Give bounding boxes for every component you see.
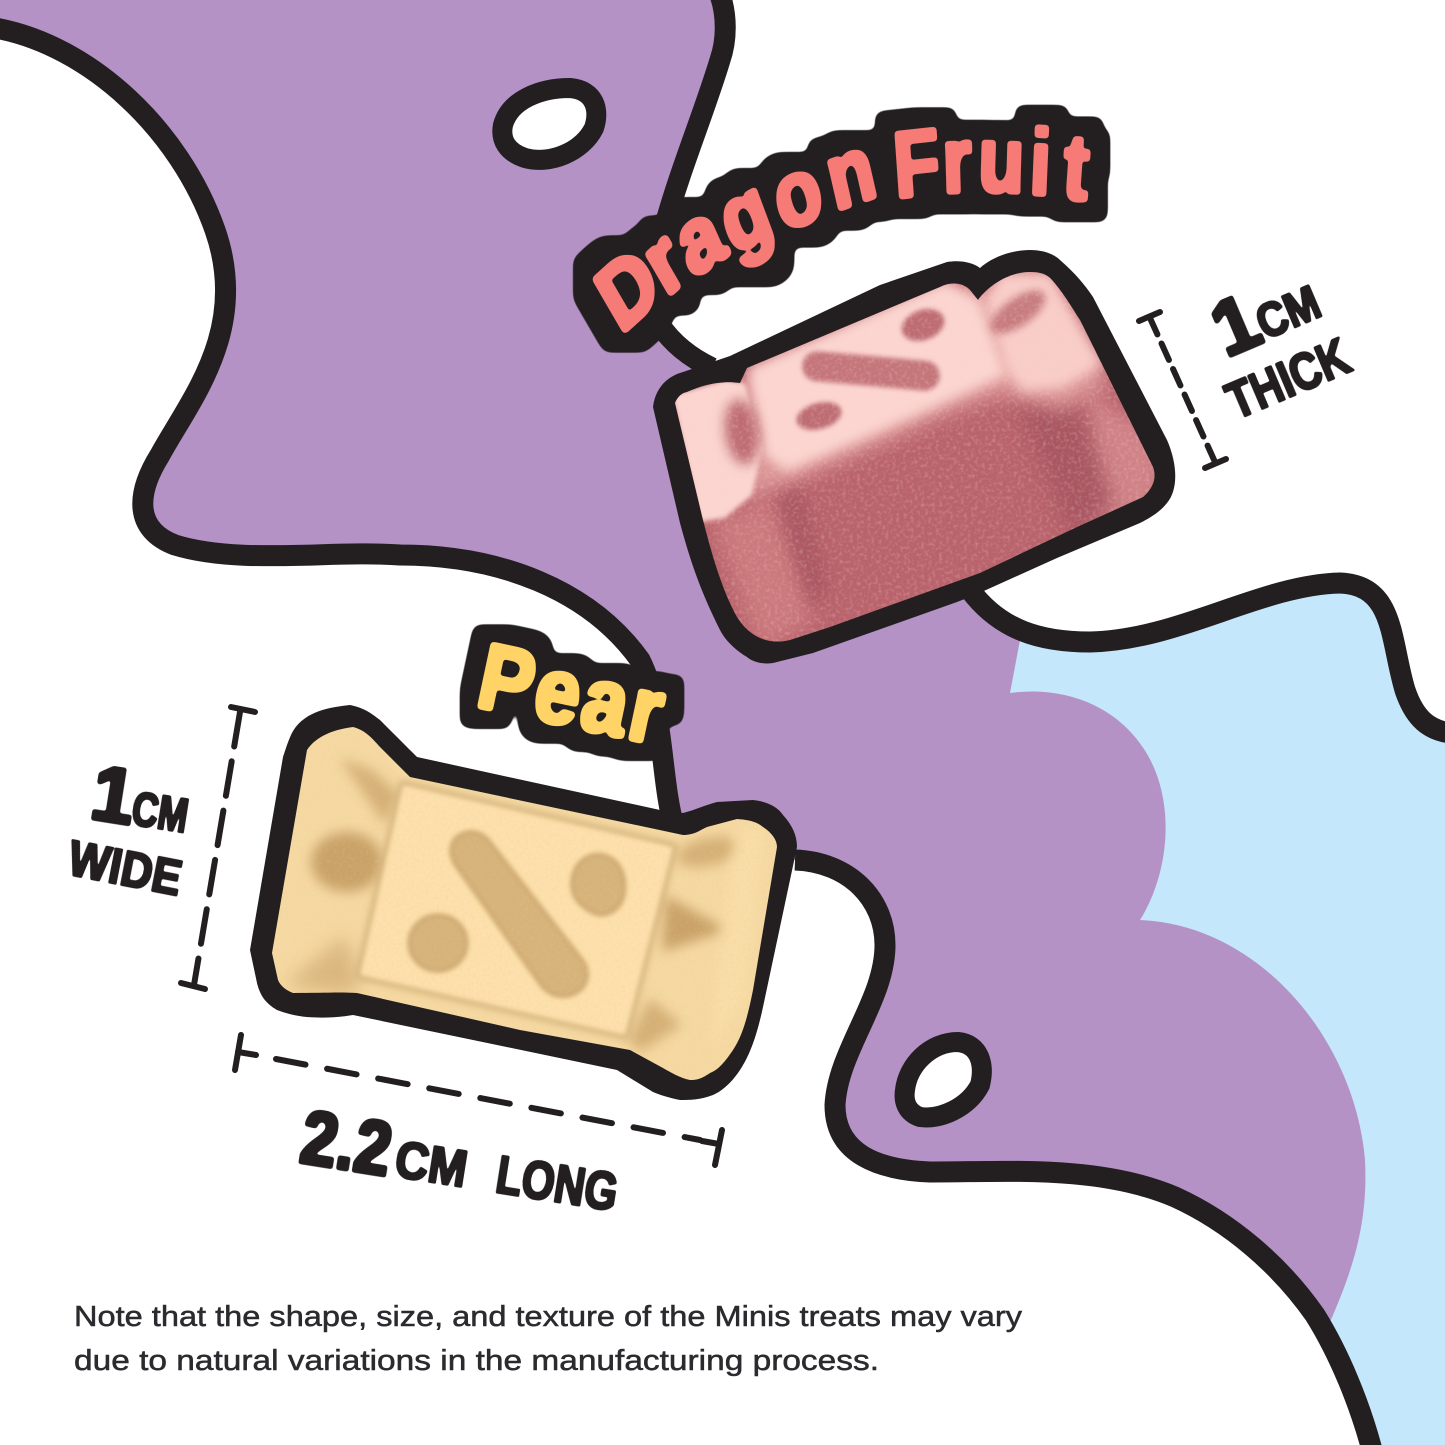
centre panel shadow xyxy=(360,785,673,1035)
wing shading xyxy=(340,758,400,825)
outline: lower curve xyxy=(795,860,1372,1445)
dimension text: 2.2cm long: 2.2 xyxy=(295,1095,398,1193)
left wing dent xyxy=(721,397,763,467)
soft halo under light areas xyxy=(745,280,1110,500)
outline: right wavy curve xyxy=(970,583,1445,733)
treat outline xyxy=(250,705,797,1100)
logo lower dent xyxy=(793,397,845,435)
right wing light edge xyxy=(720,838,748,935)
dimension text: 2.2cm long xyxy=(295,1095,622,1223)
light right wing xyxy=(985,272,1103,392)
centre panel xyxy=(360,785,673,1035)
dimension text: 1cm thick: CM xyxy=(1249,276,1328,350)
dimension text: 2.2cm long: LONG xyxy=(492,1145,622,1223)
grain texture xyxy=(676,272,1154,642)
dimension text: 1cm thick: 1 xyxy=(1198,276,1273,374)
panel: light blue shape xyxy=(1000,583,1445,1445)
dimension text: 1cm wide: 1 xyxy=(85,748,142,842)
icon: lower hole xyxy=(905,1042,982,1117)
dimension text: 1cm wide: WIDE xyxy=(64,830,186,907)
label: Pear: Pear xyxy=(470,623,677,765)
logo lower dent xyxy=(409,915,467,971)
logo upper dent xyxy=(572,854,625,915)
label: Dragon Fruit: Dragon Fruit xyxy=(581,107,1092,352)
light top face xyxy=(747,280,1007,472)
dimension text: 1cm wide xyxy=(64,748,192,907)
treat: pear xyxy=(250,705,797,1100)
mid pink right edge xyxy=(1084,396,1154,520)
dark bands xyxy=(1021,406,1119,530)
treat: dragon fruit xyxy=(653,250,1175,663)
dimension text: 1cm thick: THICK xyxy=(1218,328,1359,431)
note text: Note that the shape, size, and texture of the Minis treats may vary xyxy=(74,1301,1023,1333)
logo upper dent xyxy=(898,306,947,344)
outline: upper centre curve xyxy=(652,0,725,368)
dimension text: 2.2cm long: CM xyxy=(391,1131,471,1199)
mid pink lower band xyxy=(714,503,814,642)
dimension: thick xyxy=(1139,312,1226,468)
dimension text: 1cm wide: CM xyxy=(128,783,192,844)
treat base colour xyxy=(260,715,790,1085)
treat outline xyxy=(653,250,1175,663)
note text xyxy=(74,1301,1023,1377)
logo stick dent xyxy=(801,350,941,392)
light left wing xyxy=(672,380,762,522)
wing dent xyxy=(986,286,1050,338)
dimension: wide xyxy=(181,707,255,989)
treat base colour xyxy=(675,272,1154,642)
note text: due to natural variations in the manufacturing process. xyxy=(74,1345,879,1377)
dimension: long xyxy=(235,1035,722,1165)
grain texture xyxy=(260,715,790,1085)
logo stick dent xyxy=(451,832,587,996)
dimension text: 1cm thick xyxy=(1198,276,1359,431)
outline: upper left curve xyxy=(0,28,675,830)
icon: upper hole xyxy=(502,88,596,160)
